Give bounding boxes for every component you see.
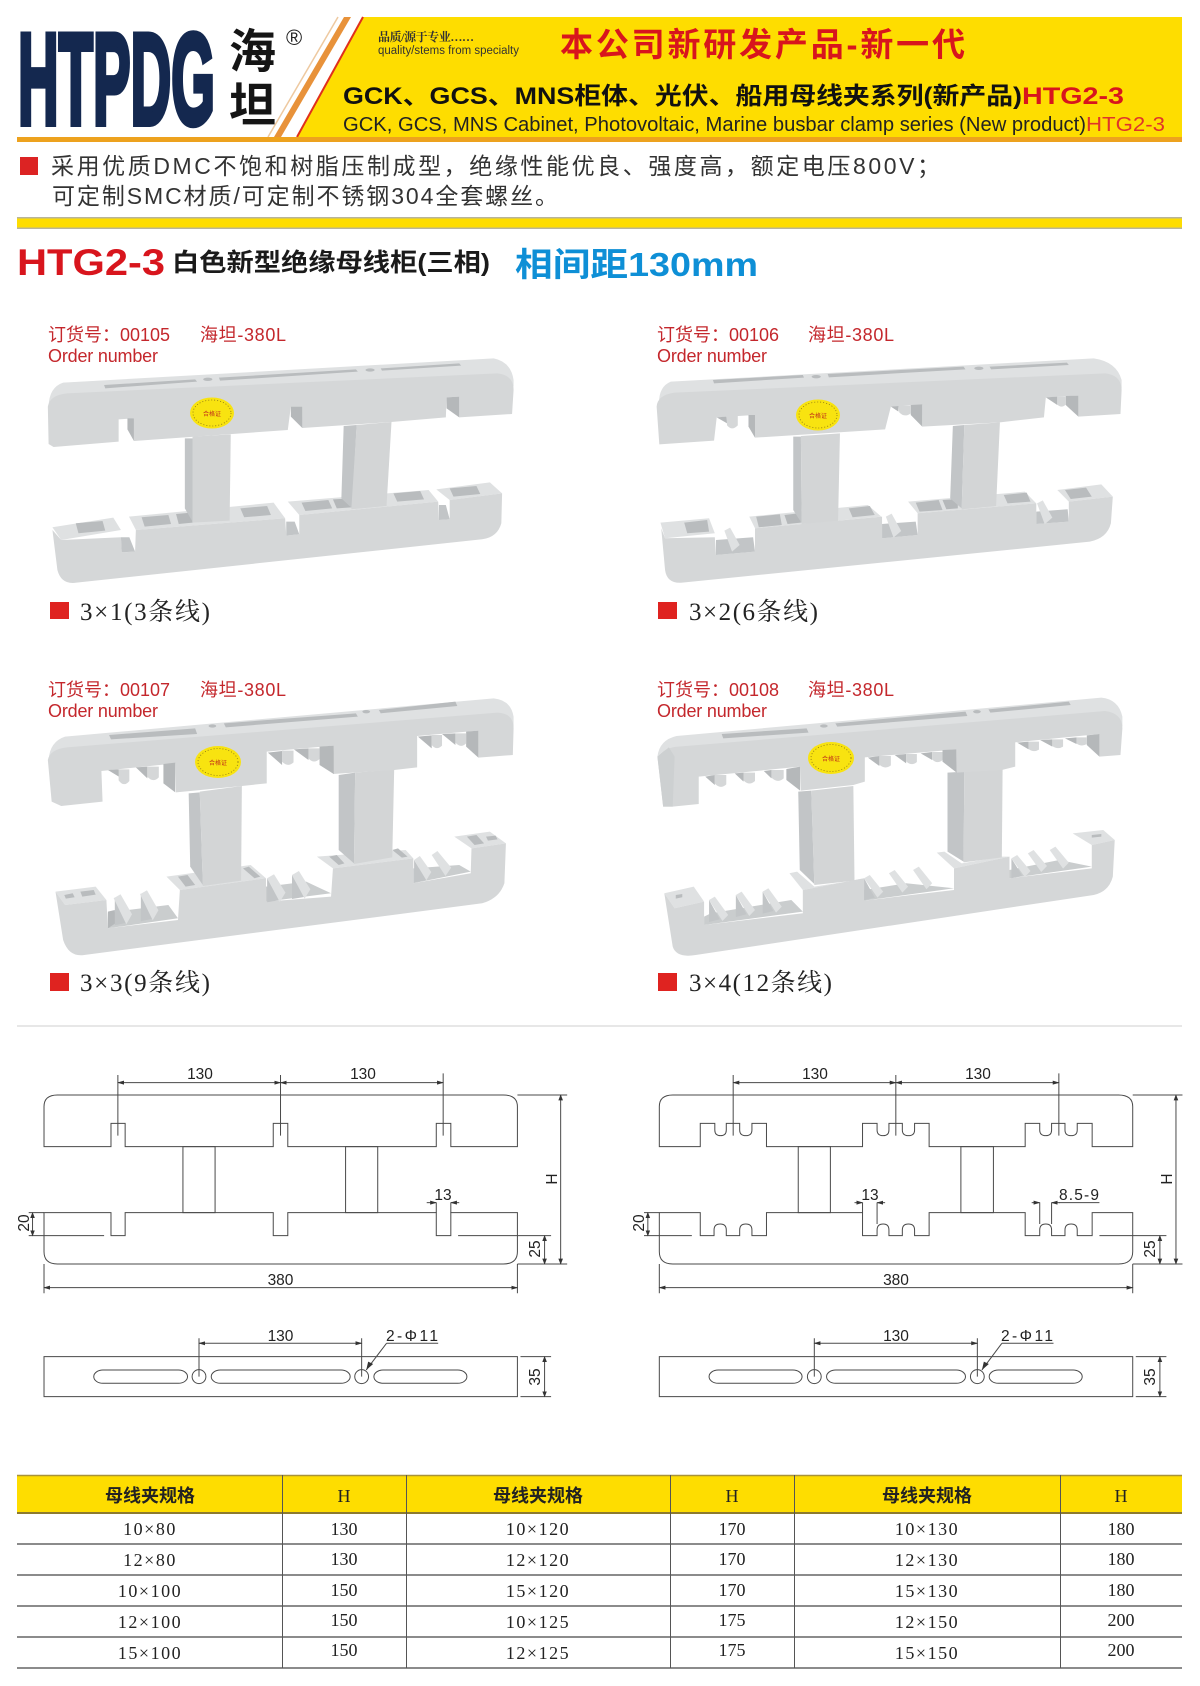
product 00107 photo [48, 698, 514, 955]
product 00107 caption: 3×3(9条线) [80, 969, 210, 997]
top view labels: 130 [883, 1328, 909, 1345]
table header row: H [338, 1486, 350, 1506]
product 00105 order label: 订货号：00105 [48, 325, 170, 345]
top view labels: 35 [1142, 1368, 1159, 1386]
table rows: 180 [1108, 1580, 1134, 1600]
table rows: 200 [1108, 1610, 1134, 1630]
banner title: 本公司新研发产品-新一代 [560, 26, 965, 63]
product 00106 photo [657, 358, 1122, 583]
table rows: 15×150 [895, 1643, 959, 1663]
table rows: 12×100 [118, 1612, 182, 1632]
specification table [17, 1475, 1182, 1668]
English product line: GCK, GCS, MNS Cabinet, Photovoltaic, Marine busbar clamp series (New product) [343, 113, 1086, 136]
product 00106 certification seal [796, 400, 840, 430]
slogan [378, 29, 519, 57]
logo Chinese name [229, 25, 276, 132]
table rows: 10×130 [895, 1519, 959, 1539]
product 00107 certification seal: 合格证 [209, 759, 227, 767]
dimension labels [631, 1066, 1176, 1289]
dimension labels: 130 [802, 1066, 828, 1083]
product 00108 order label: 订货号：00108 [657, 680, 779, 700]
product 00105 certification seal [190, 398, 234, 428]
top view labels [268, 1328, 544, 1386]
product 00105 photo [48, 358, 514, 583]
product 00107 order label: Order number [48, 701, 158, 721]
table rows: 170 [718, 1549, 746, 1569]
dimension labels: 130 [350, 1066, 376, 1083]
table rows: 10×120 [506, 1519, 570, 1539]
table rows: 175 [718, 1610, 746, 1630]
table rows: 130 [330, 1519, 358, 1539]
orange banner underline [17, 137, 1182, 142]
section heading: HTG2-3 [17, 242, 165, 283]
table rows: 12×120 [506, 1550, 570, 1570]
slanted accent stripes [268, 17, 363, 137]
table rows: 10×80 [123, 1519, 177, 1539]
product 00108 caption: 3×4(12条线) [689, 969, 832, 997]
table rows: 12×150 [895, 1612, 959, 1632]
logo Chinese name: 坦 [229, 79, 276, 132]
table rows: 150 [330, 1580, 358, 1600]
product 00106 order label [657, 325, 894, 366]
product 00106 certification seal: 合格证 [809, 412, 827, 420]
product 00106 order label: 海坦-380L [808, 325, 894, 345]
dimension labels: 20 [16, 1214, 33, 1232]
product 00105 certification seal: 合格证 [203, 410, 221, 418]
product 00108 certification seal [808, 742, 854, 774]
dimension labels [16, 1066, 561, 1289]
table rows: 12×130 [895, 1550, 959, 1570]
top view labels [883, 1328, 1159, 1386]
slogan: 品质/源于专业…… [378, 29, 474, 44]
slogan: quality/stems from specialty [378, 45, 519, 57]
description text [51, 153, 940, 209]
header banner [17, 6, 1182, 152]
product 00105 order label [48, 325, 286, 366]
feature description [20, 153, 940, 209]
technical drawing: left front view [16, 1066, 567, 1293]
product 00105 order label: Order number [48, 346, 158, 366]
description text: 采用优质DMC不饱和树脂压制成型，绝缘性能优良、强度高，额定电压800V； [51, 153, 940, 179]
Chinese product line: HTG2-3 [1022, 83, 1124, 110]
product 00106 caption: 3×2(6条线) [689, 598, 818, 626]
registered mark: ® [286, 25, 302, 50]
product 00108 order label: 海坦-380L [808, 680, 894, 700]
dimension labels: 20 [631, 1214, 648, 1232]
description text: 可定制SMC材质/可定制不锈钢304全套螺丝。 [52, 183, 558, 209]
top view labels: 35 [527, 1368, 544, 1386]
top view labels: 130 [268, 1328, 294, 1345]
table rows: 175 [718, 1640, 746, 1660]
dimension labels: H [1159, 1173, 1176, 1185]
dimension labels: 8.5-9 [1059, 1187, 1099, 1204]
table rows: 170 [718, 1519, 746, 1539]
dimension labels: 13 [861, 1187, 879, 1204]
product 00108 photo [657, 698, 1122, 956]
product 00106 order label: 订货号：00106 [657, 325, 779, 345]
table rows: 180 [1108, 1549, 1134, 1569]
technical drawing: left top view [44, 1328, 551, 1397]
table rows: 180 [1108, 1519, 1134, 1539]
product 00106 order label: Order number [657, 346, 767, 366]
table rows: 15×120 [506, 1581, 570, 1601]
table rows: 200 [1108, 1640, 1134, 1660]
table header row: 母线夹规格 [105, 1486, 195, 1506]
table rows [118, 1519, 1134, 1663]
section heading [17, 242, 758, 283]
table rows: 15×130 [895, 1581, 959, 1601]
product 00105 caption: 3×1(3条线) [80, 598, 210, 626]
product 00107 order label [48, 680, 286, 721]
Chinese product line: GCK、GCS、MNS柜体、光伏、船用母线夹系列(新产品) [343, 83, 1022, 110]
product 00107 certification seal [195, 746, 241, 778]
dimension labels: 380 [268, 1272, 294, 1289]
dimension labels: H [544, 1173, 561, 1185]
dimension labels: 25 [527, 1240, 544, 1258]
section heading: 白色新型绝缘母线柜(三相) [172, 249, 490, 277]
table rows: 10×100 [118, 1581, 182, 1601]
product 00107 order label: 订货号：00107 [48, 680, 170, 700]
red bullet [20, 157, 38, 175]
section heading: 相间距130mm [515, 246, 758, 283]
top view labels: 2-Φ11 [1001, 1328, 1053, 1345]
table rows: 12×80 [123, 1550, 177, 1570]
top view labels: 2-Φ11 [386, 1328, 438, 1345]
technical drawing: right front view [631, 1066, 1182, 1293]
table header row [17, 1475, 1182, 1513]
table rows: 12×125 [506, 1643, 570, 1663]
table rows: 150 [330, 1610, 358, 1630]
table header row: 母线夹规格 [493, 1486, 583, 1506]
logo Chinese name: 海 [229, 25, 276, 78]
product 00108 certification seal: 合格证 [822, 755, 840, 763]
dimension labels: 380 [883, 1272, 909, 1289]
table header row: 母线夹规格 [882, 1486, 972, 1506]
English product line: HTG2-3 [1086, 113, 1165, 136]
table rows: 170 [718, 1580, 746, 1600]
table header row: H [1114, 1486, 1128, 1506]
product 00105 order label: 海坦-380L [200, 325, 286, 345]
technical drawing: right top view [659, 1328, 1166, 1397]
dimension labels: 130 [965, 1066, 991, 1083]
product 00108 order label [657, 680, 894, 721]
dimension labels: 25 [1142, 1240, 1159, 1258]
table rows: 150 [330, 1640, 358, 1660]
product 00108 order label: Order number [657, 701, 767, 721]
dimension labels: 13 [434, 1187, 452, 1204]
header banner: HTPDG [18, 6, 215, 152]
table rows: 10×125 [506, 1612, 570, 1632]
table rows: 15×100 [118, 1643, 182, 1663]
dimension labels: 130 [187, 1066, 213, 1083]
table header row: H [726, 1486, 738, 1506]
table rows: 130 [330, 1549, 358, 1569]
yellow banner background [297, 17, 1182, 137]
yellow divider bar [17, 217, 1182, 229]
product 00107 order label: 海坦-380L [200, 680, 286, 700]
